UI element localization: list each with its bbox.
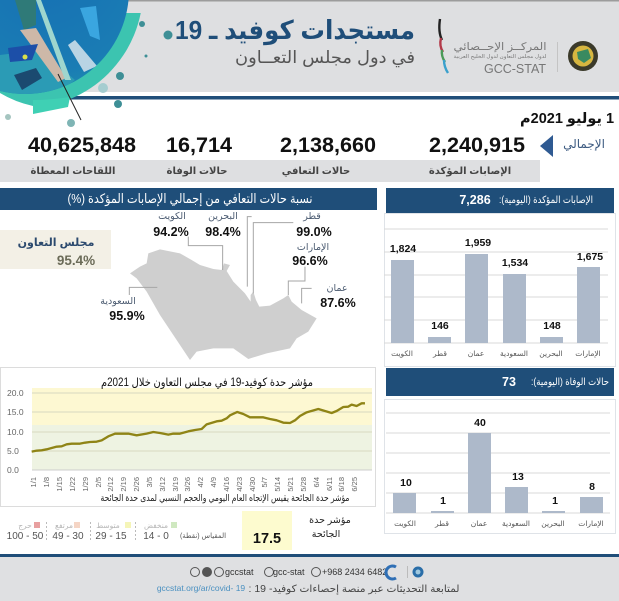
vaccines [28, 132, 136, 177]
x axis dates: 6/18 [337, 477, 346, 492]
y axis: 0.0 [7, 465, 19, 475]
total label: الإجمالي [563, 137, 605, 151]
Bahrain: البحرين [208, 211, 238, 222]
heading: 7,286 [459, 193, 491, 207]
map [130, 249, 317, 360]
callout lines [129, 217, 312, 303]
panel: daily confirmed bar chart [384, 188, 616, 366]
values: 1 [440, 495, 446, 507]
medium [95, 521, 131, 542]
values [390, 237, 603, 332]
values: 1 [552, 495, 558, 507]
axis labels: الإمارات [578, 519, 604, 528]
heading: نسبة حالات التعافي من إجمالي الإصابات المؤكدة (%) [68, 191, 312, 207]
logo: GCC-STAT [439, 19, 598, 76]
axis labels [394, 519, 604, 528]
x axis dates: 4/23 [235, 477, 244, 492]
x axis dates: 6/4 [312, 477, 321, 487]
values: 146 [431, 320, 449, 332]
heading [386, 188, 614, 213]
Oman: عمان [326, 283, 348, 294]
Kuwait [153, 211, 189, 239]
Qatar [296, 211, 332, 239]
Saudi: 95.9% [109, 309, 145, 323]
axis labels: عمان [468, 349, 484, 358]
Bahrain: 98.4% [205, 225, 241, 239]
axis labels: عمان [471, 519, 487, 528]
legend: severity scale [7, 521, 226, 542]
axis labels: الإمارات [575, 349, 601, 358]
axis labels: الكويت [394, 519, 416, 528]
low: منخفض [144, 521, 168, 530]
Oman: 87.6% [320, 296, 356, 310]
vaccines: اللقاحات المعطاة [31, 166, 115, 177]
deaths [166, 132, 232, 177]
Saudi: السعودية [100, 296, 136, 307]
severity label: مؤشر حدة [309, 515, 351, 526]
x axis dates [29, 477, 359, 492]
panel: daily deaths bar chart [384, 368, 616, 534]
url: gccstat.org/ar/covid- 19 [157, 583, 245, 593]
logo: GCC-STAT: GCC-STAT [484, 62, 546, 76]
values: 1,675 [577, 251, 603, 263]
x axis dates: 2/5 [94, 477, 103, 487]
axis labels: السعودية [500, 349, 528, 358]
x axis dates: 1/8 [42, 477, 51, 487]
values: 1,959 [465, 237, 491, 249]
subtitle: في دول مجلس التعــاون [235, 48, 415, 68]
x axis dates: 4/2 [196, 477, 205, 487]
arrow [540, 135, 553, 157]
x axis dates: 6/25 [350, 477, 359, 492]
axis labels: قطر [432, 349, 447, 358]
header band [0, 0, 619, 100]
bars [393, 433, 603, 513]
high [52, 521, 84, 542]
recoveries: حالات التعافي [282, 166, 350, 177]
x axis dates: 3/12 [158, 477, 167, 492]
y axis: 10.0 [7, 427, 24, 437]
axis labels: البحرين [539, 349, 563, 358]
heading: الإصابات المؤكدة (اليومية): [499, 195, 593, 206]
values [400, 417, 595, 507]
GCC box [0, 230, 111, 269]
header image: circular photo with teal arc [0, 0, 141, 120]
social handles: gccstat [225, 567, 254, 577]
medium: 29 - 15 [95, 531, 127, 542]
footer: gcc-stat [273, 567, 305, 577]
values: 148 [543, 320, 561, 332]
severity label: الجائحة [312, 529, 340, 540]
UAE: 96.6% [292, 254, 328, 268]
axis labels: البحرين [541, 519, 565, 528]
deaths: حالات الوفاة [167, 166, 227, 177]
UAE [292, 242, 329, 268]
title: مستجدات كوفيد ـ 19 [175, 15, 415, 46]
x axis dates: 3/5 [145, 477, 154, 487]
severity label [309, 515, 351, 540]
recoveries [280, 132, 376, 177]
logo: GCC-STAT: لدول مجلس التعاون لدول الخليج العربية [454, 54, 547, 60]
values: 1,824 [390, 243, 416, 255]
medium: متوسط [96, 521, 120, 530]
y axis [7, 388, 24, 475]
scale label: المقياس (نقطة) [180, 533, 226, 540]
x axis dates: 1/1 [29, 477, 38, 487]
heading [386, 368, 614, 396]
vaccines: 40,625,848 [28, 132, 136, 157]
totals row [0, 132, 605, 182]
confirmed cases [429, 132, 525, 177]
x axis dates: 3/19 [171, 477, 180, 492]
bars [391, 254, 600, 343]
axis labels: الكويت [391, 349, 413, 358]
logo: GCC-STAT: المركــز الإحــصائي [454, 41, 546, 53]
y axis: 5.0 [7, 446, 19, 456]
critical [7, 521, 44, 542]
Qatar: 99.0% [296, 225, 332, 239]
x axis dates: 5/7 [260, 477, 269, 487]
Kuwait: الكويت [158, 211, 186, 222]
Bahrain [205, 211, 241, 239]
x axis dates: 6/11 [325, 477, 334, 491]
date: 1 يوليو 2021م [520, 111, 614, 127]
high: مرتفع [55, 521, 73, 530]
x axis dates: 2/12 [106, 477, 115, 492]
icon: logos [386, 566, 424, 579]
title: مؤشر حدة كوفيد-19 في مجلس التعاون خلال 2021م [101, 377, 313, 390]
x axis dates: 2/19 [119, 477, 128, 492]
deaths: 16,714 [166, 132, 232, 157]
Saudi [100, 296, 145, 323]
x axis dates: 3/26 [183, 477, 192, 492]
axis labels: قطر [434, 519, 449, 528]
panel: severity line chart [0, 368, 376, 506]
line [32, 403, 365, 452]
social icons [190, 568, 320, 576]
y axis: 15.0 [7, 407, 24, 417]
follow text: لمتابعة التحديثات عبر منصة إحصاءات كوفيد- 19 : [248, 584, 460, 595]
axis labels: السعودية [502, 519, 530, 528]
severity value box [242, 511, 292, 550]
footer: +968 2434 6482 [322, 567, 387, 577]
x axis dates: 4/16 [222, 477, 231, 492]
confirmed cases: 2,240,915 [429, 132, 525, 157]
icon: GCC emblem [568, 41, 598, 71]
icon: ribbon [439, 19, 448, 73]
values: 13 [512, 471, 524, 483]
x axis dates: 2/26 [132, 477, 141, 492]
x axis dates: 1/15 [55, 477, 64, 492]
x axis dates: 1/29 [81, 477, 90, 492]
GCC box: 95.4% [57, 253, 95, 268]
values: 1,534 [502, 257, 528, 269]
plot bands [32, 388, 372, 470]
x axis dates: 4/30 [248, 477, 257, 492]
x axis dates: 5/14 [273, 477, 282, 492]
footer [0, 554, 619, 601]
UAE: الإمارات [297, 242, 329, 253]
x axis dates: 4/9 [209, 477, 218, 487]
values: 40 [474, 417, 486, 429]
x axis dates: 1/22 [68, 477, 77, 492]
GCC box: مجلس التعاون [18, 237, 94, 249]
low: 14 - 0 [143, 531, 169, 542]
panel: recovery rate map [0, 188, 377, 360]
critical: 100 - 50 [7, 531, 44, 542]
x axis dates: 5/28 [299, 477, 308, 492]
axis labels [391, 349, 601, 358]
values: 8 [589, 481, 595, 493]
Qatar: قطر [302, 211, 321, 222]
confirmed cases: الإصابات المؤكدة [429, 166, 511, 177]
severity value box: 17.5 [253, 531, 281, 547]
low [143, 521, 177, 542]
critical: حرج [18, 521, 32, 530]
caption: مؤشر حدة الجائحة يقيس الإتجاه العام اليومي والحجم النسبي لمدى حدة الجائحة [100, 493, 350, 504]
heading: 73 [502, 375, 516, 389]
recoveries: 2,138,660 [280, 132, 376, 157]
heading [0, 188, 377, 210]
x axis dates: 5/21 [286, 477, 295, 492]
Kuwait: 94.2% [153, 225, 189, 239]
label band [0, 160, 540, 182]
Oman [320, 283, 356, 310]
droplets [5, 21, 172, 127]
values: 10 [400, 477, 412, 489]
y axis: 20.0 [7, 388, 24, 398]
high: 49 - 30 [52, 531, 84, 542]
